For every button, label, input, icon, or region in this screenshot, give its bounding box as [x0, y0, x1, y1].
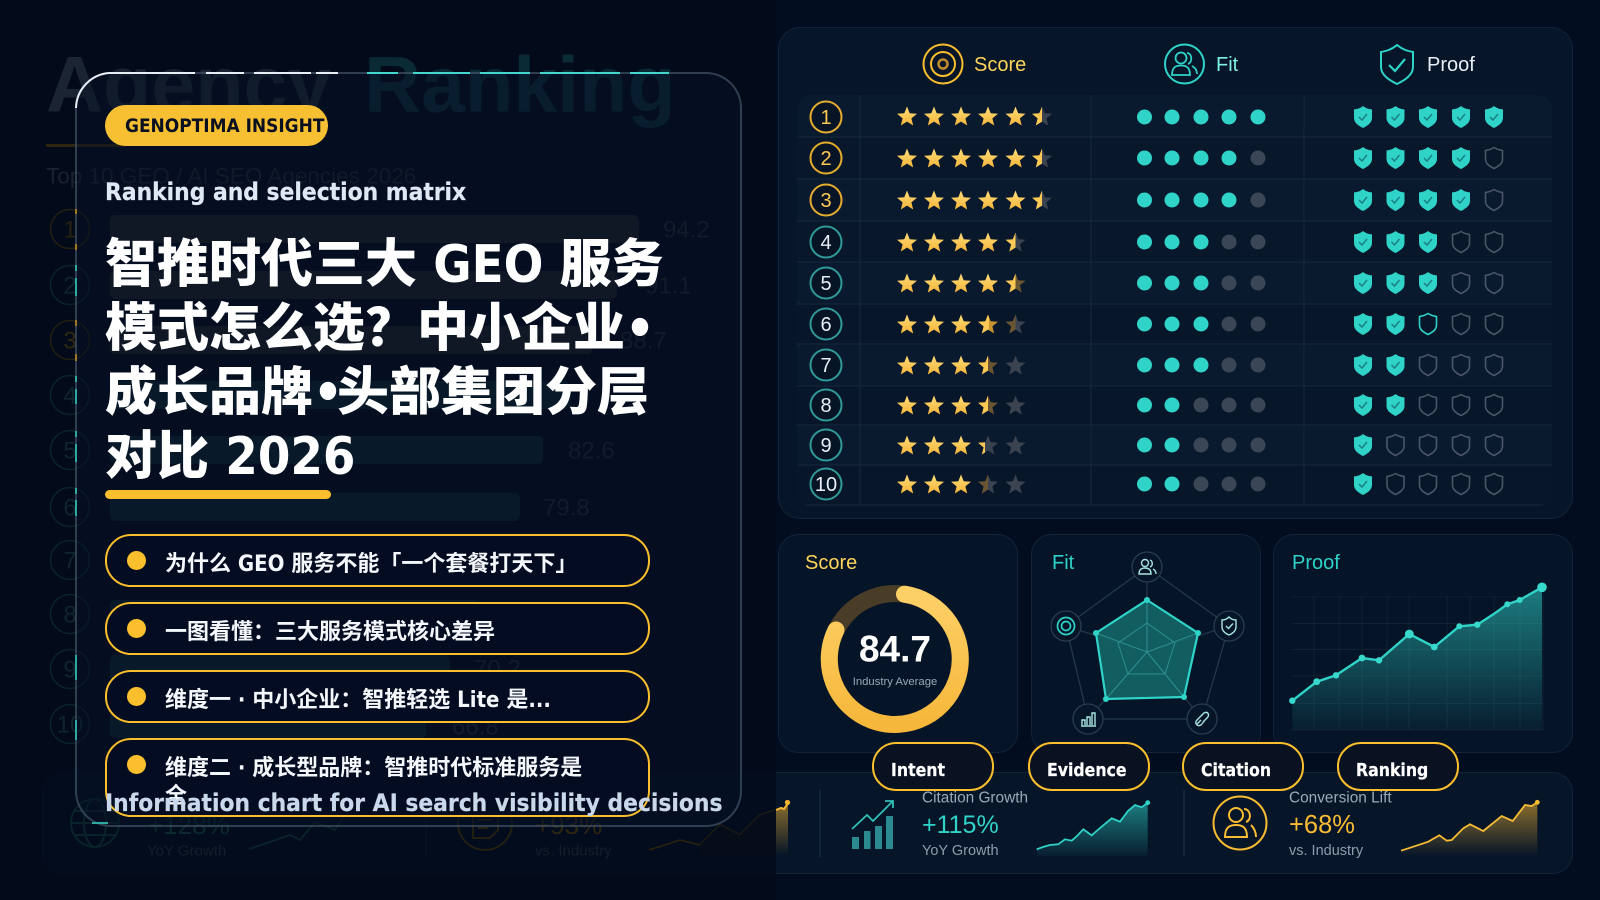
ghost metrics: +93% [535, 810, 602, 840]
bullet 4: 维度二 · 成长型品牌：智推时代标准服务是 [165, 756, 582, 781]
fit dots [1137, 110, 1266, 492]
tag: ranking: Ranking [1356, 761, 1428, 781]
panel: score donut: Score [805, 552, 857, 574]
ghost rank circles: 2 [63, 272, 77, 300]
panel: proof trend [1274, 534, 1572, 752]
rank numbers: 5 [820, 273, 832, 295]
donut chart [829, 594, 960, 724]
bullet 1: 为什么 GEO 服务不能「一个套餐打天下」 [165, 552, 577, 577]
tag: evidence: Evidence [1047, 761, 1127, 781]
metric: conversion lift: Conversion Lift [1289, 790, 1392, 806]
ghost metrics: vs. Industry [535, 842, 612, 860]
icon: audience [1214, 796, 1266, 850]
panel: left insight card [75, 72, 742, 827]
ghost subtitle: Top 10 GEO / AI SEO Agencies 2026 [46, 164, 416, 188]
ghost rank circles: 6 [63, 494, 77, 522]
radar axis icons [1051, 552, 1244, 734]
rank numbers: 6 [820, 314, 832, 336]
ghost rank circles: 10 [57, 712, 83, 738]
title underline [105, 490, 331, 499]
rank numbers: 9 [820, 435, 832, 457]
badge: GENOPTIMA INSIGHT [125, 115, 324, 137]
matrix header: proof: Proof [1427, 54, 1475, 76]
matrix table grid [797, 95, 1552, 506]
matrix header: fit [1165, 44, 1239, 84]
card edge highlights [75, 72, 669, 824]
ghost heading [46, 40, 676, 128]
rank numbers: 8 [820, 395, 832, 417]
title: 模式怎么选？中小企业• [105, 299, 649, 359]
rank numbers [810, 102, 842, 500]
matrix header: proof [1381, 45, 1475, 84]
panel: proof trend: Proof [1292, 552, 1340, 574]
tag: evidence [1028, 742, 1150, 791]
sparkline: citation [1037, 800, 1150, 856]
title: 对比 2026 [105, 427, 355, 487]
ghost values [452, 216, 710, 740]
title: 成长品牌•头部集团分层 [105, 363, 649, 423]
donut chart: 84.7 [859, 628, 931, 670]
panel: score donut [778, 534, 1018, 752]
bullet 3 [105, 670, 650, 723]
ghost heading: Agency [46, 40, 331, 128]
rank numbers: 3 [820, 190, 832, 212]
tag: ranking [1337, 742, 1459, 791]
ghost rank circles: 3 [63, 328, 77, 354]
ghost values: 94.2 [663, 216, 710, 244]
ghost metrics [42, 772, 802, 874]
tag: citation: Citation [1201, 761, 1271, 781]
badge [105, 105, 328, 146]
sparkline: conversion [1401, 800, 1540, 856]
icon: rising bars [852, 801, 893, 849]
tag: intent [872, 742, 994, 791]
matrix header: fit: Fit [1216, 54, 1239, 76]
bullet 2: 一图看懂：三大服务模式核心差异 [165, 620, 495, 645]
ghost rank circles: 9 [63, 656, 77, 684]
title [105, 235, 664, 487]
ghost bars [110, 215, 639, 738]
rank numbers: 7 [820, 355, 832, 377]
bullet 1 [105, 534, 650, 587]
metric: conversion lift: +68% [1289, 811, 1355, 839]
metric: conversion lift [1289, 790, 1392, 859]
ghost ranking layer [46, 40, 776, 860]
rank numbers: 1 [820, 107, 832, 129]
tag: citation [1182, 742, 1304, 791]
ghost rank circles: 5 [63, 438, 77, 464]
dashboard background [776, 27, 1573, 874]
ghost values: 66.8 [452, 714, 499, 740]
ghost rank circles: 4 [63, 382, 77, 410]
line chart [1289, 582, 1547, 730]
ghost values: 82.6 [568, 438, 615, 464]
bullet 4 [105, 738, 650, 817]
panel: growth metrics [42, 772, 1572, 874]
metric: citation growth: +115% [922, 811, 999, 839]
tag: intent: Intent [891, 761, 945, 781]
ghost heading: Ranking [364, 40, 676, 128]
panel: fit radar: Fit [1052, 552, 1075, 574]
rank numbers: 2 [820, 148, 832, 170]
bullet 4: 全 [165, 784, 187, 809]
donut chart: Industry Average [853, 676, 937, 688]
bullet 3: 维度一 · 中小企业：智推轻选 Lite 是... [165, 688, 551, 713]
panel: rating matrix [778, 28, 1572, 518]
amber sparkline end [776, 800, 790, 855]
title: 智推时代三大 GEO 服务 [105, 235, 664, 295]
score stars [897, 106, 1052, 494]
ghost values: 79.8 [543, 494, 590, 522]
ghost rank circles: 1 [63, 216, 77, 244]
ghost rank circles [50, 210, 90, 744]
subtitle: Ranking and selection matrix [105, 177, 466, 206]
ghost rank circles: 7 [63, 548, 77, 574]
metric: citation growth [922, 790, 1028, 859]
ghost metrics: YoY Growth [147, 842, 226, 860]
left dark overlay [0, 0, 776, 900]
rank numbers: 4 [820, 232, 832, 254]
metric: citation growth: YoY Growth [922, 843, 999, 859]
rank numbers: 10 [815, 474, 837, 496]
ghost values: 91.1 [645, 272, 692, 300]
radar chart [1051, 552, 1244, 734]
panel: fit radar [1032, 534, 1260, 752]
ghost metrics: +128% [148, 810, 230, 840]
matrix header: score [924, 44, 1026, 84]
metric: citation growth: Citation Growth [922, 790, 1028, 806]
ghost rank circles: 8 [63, 602, 77, 628]
bullet 2 [105, 602, 650, 655]
ghost values: 88.7 [620, 328, 667, 354]
matrix header: score: Score [974, 54, 1026, 76]
footer caption: Information chart for AI search visibility decisions [105, 788, 722, 817]
proof shields [1354, 106, 1503, 495]
ghost values: 70.2 [474, 656, 521, 682]
metric: conversion lift: vs. Industry [1289, 843, 1364, 859]
